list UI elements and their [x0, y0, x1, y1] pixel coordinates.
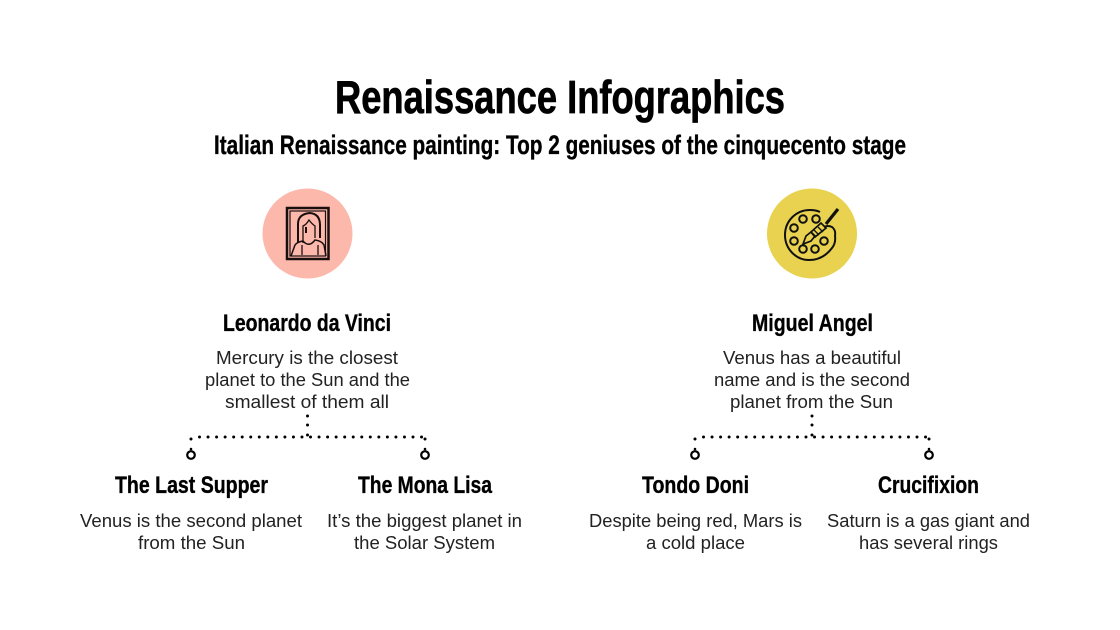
description: Mercury: [205, 347, 410, 412]
subtitle: Italian Renaissance painting: Top 2 geniuses of the cinquecento stage: [214, 130, 906, 160]
title: Renaissance Infographics: [335, 71, 785, 123]
item: Crucifixion: Crucifixion: [878, 472, 979, 499]
description: Mercury: Mercury is the closest: [216, 347, 399, 368]
item: Crucifixion: has several rings: [859, 532, 998, 553]
description: Mercury: smallest of them all: [225, 391, 389, 412]
icon: framed portrait: [262, 188, 352, 278]
tree connector left: [187, 414, 429, 459]
panel: Leonardo da Vinci: [80, 188, 522, 553]
description: Venus: Venus has a beautiful: [723, 347, 901, 368]
item: The Last Supper: Venus is the second planet: [80, 510, 303, 531]
icon: paint palette: [767, 188, 857, 278]
description: Venus: [714, 347, 910, 412]
description: Venus: planet from the Sun: [730, 391, 893, 412]
item: Tondo Doni: Despite being red, Mars is: [589, 510, 802, 531]
item: The Mona Lisa: [327, 472, 522, 553]
item: Crucifixion: [827, 472, 1030, 553]
description: Mercury: planet to the Sun and the: [205, 369, 410, 390]
item: The Last Supper: from the Sun: [138, 532, 245, 553]
name: Miguel Angel: Miguel Angel: [752, 310, 873, 337]
item: The Mona Lisa: It’s the biggest planet in: [327, 510, 522, 531]
panel: Miguel Angel: [589, 188, 1030, 553]
tree connector right: [691, 414, 933, 459]
item: Tondo Doni: Tondo Doni: [642, 472, 749, 499]
item: The Last Supper: The Last Supper: [115, 472, 268, 499]
item: The Mona Lisa: The Mona Lisa: [358, 472, 493, 499]
item: The Last Supper: [80, 472, 303, 553]
item: The Mona Lisa: the Solar System: [354, 532, 495, 553]
item: Tondo Doni: a cold place: [646, 532, 745, 553]
item: Crucifixion: Saturn is a gas giant and: [827, 510, 1030, 531]
description: Venus: name and is the second: [714, 369, 910, 390]
item: Tondo Doni: [589, 472, 802, 553]
name: Leonardo da Vinci: Leonardo da Vinci: [223, 310, 391, 337]
